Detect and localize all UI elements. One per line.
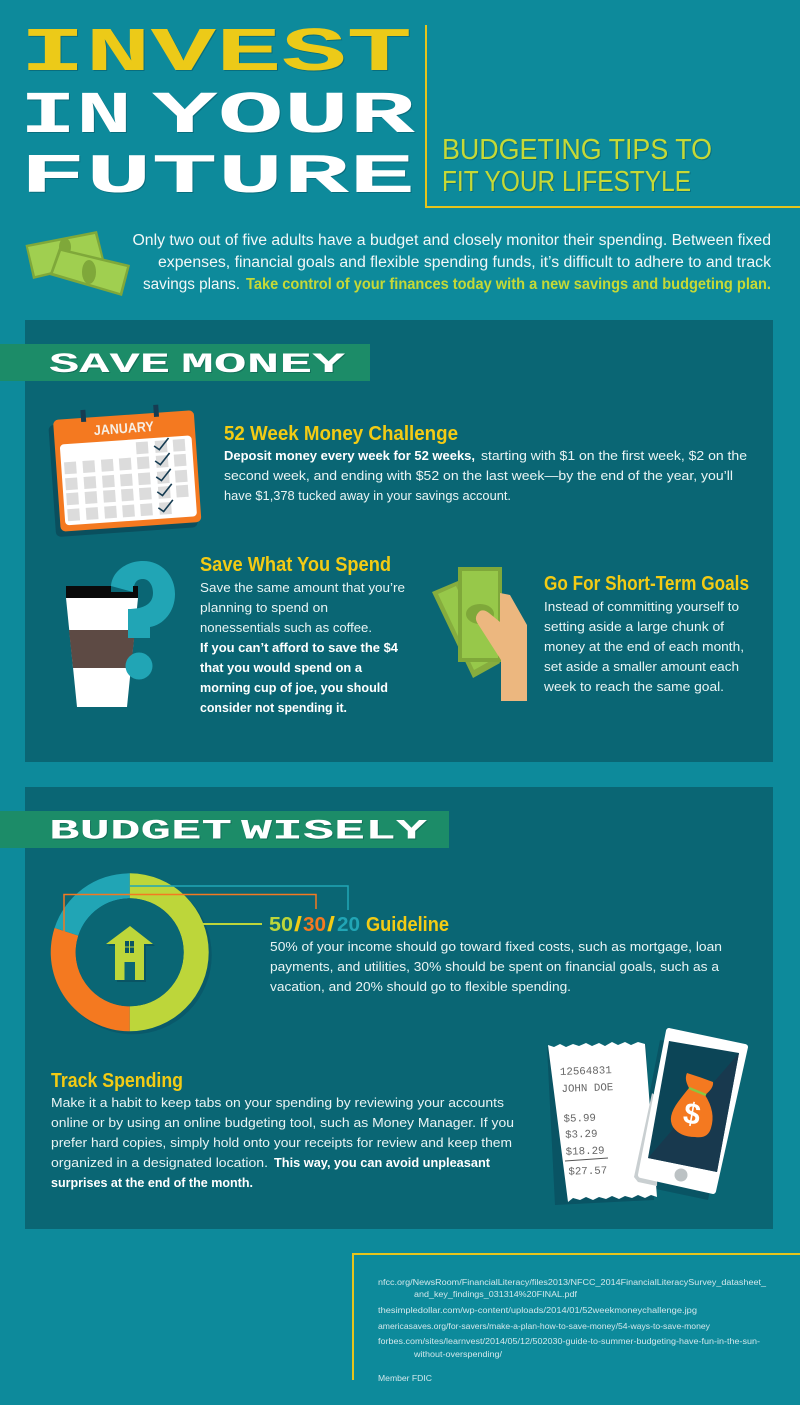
text: track spending: Make it a habit to keep tabs on your spending by reviewing your accounts: [51, 1095, 505, 1110]
sources text: forbes.com/sites/learnvest/2014/05/12/502030-guide-to-summer-budgeting-have-fun-in-the-sun-: [378, 1336, 760, 1346]
icon: receipt: JOHN DOE: [561, 1082, 614, 1096]
text: 50/30/20 guideline: 20: [337, 913, 360, 936]
section ribbon: save money: [0, 344, 370, 381]
intro text: Take control of your finances today with a new savings and budgeting plan.: [246, 276, 771, 293]
icon: receipt: $5.99: [563, 1113, 596, 1126]
text: 50/30/20 guideline: /: [294, 913, 302, 936]
text: save what you spend: If you can’t afford to save the $4: [200, 640, 399, 655]
text: 50/30/20 guideline: 30: [303, 913, 326, 936]
text: 52 week money challenge: 52 Week Money Challenge: [224, 422, 458, 445]
connector lines: [64, 886, 348, 933]
text: go for short-term goals: money at the end of each month,: [544, 639, 744, 654]
section ribbon: save money: SAVE: [49, 350, 170, 381]
icon: receipt: 12564831: [560, 1065, 612, 1079]
section ribbon: save money: MONEY: [181, 350, 345, 381]
title line: in: IN: [20, 83, 132, 150]
section ribbon: budget wisely: [0, 811, 449, 848]
intro text: expenses, financial goals and flexible spending funds, it’s difficult to adhere to and track: [158, 254, 771, 271]
sources text: americasaves.org/for-savers/make-a-plan-how-to-save-money/54-ways-to-save-money: [378, 1321, 711, 1331]
icon: phone with money bag: $: [681, 1097, 703, 1132]
icon: house: [106, 926, 155, 982]
section ribbon: budget wisely: WISELY: [241, 816, 427, 848]
sources frame: [353, 1254, 800, 1380]
text: save what you spend: morning cup of joe, you should: [200, 680, 388, 695]
icon: receipt: $3.29: [565, 1129, 598, 1142]
text: 50/30/20 guideline: [269, 913, 722, 994]
text: save what you spend: nonessentials such as coffee.: [200, 620, 372, 635]
text: go for short-term goals: Instead of committing yourself to: [544, 599, 739, 614]
text: go for short-term goals: week to reach the same goal.: [543, 679, 724, 694]
sources text: without-overspending/: [413, 1349, 503, 1359]
sources text: [378, 1277, 766, 1383]
text: 50/30/20 guideline: vacation, and 20% should go to flexible spending.: [270, 979, 571, 994]
text: 52 week money challenge: second week, and ending with $52 on the last week—by the end of the year, you’ll: [224, 468, 733, 483]
icon: dollar bills: [26, 231, 130, 296]
icon: calendar: [47, 402, 202, 537]
icon: receipt: $27.57: [568, 1165, 607, 1179]
title line: invest: INVEST: [20, 18, 412, 89]
intro text: Only two out of five adults have a budget and closely monitor their spending. Between fixed: [132, 232, 771, 249]
icon: phone with money bag: [634, 1031, 745, 1191]
text: go for short-term goals: [543, 572, 749, 694]
icon: receipt: [547, 1042, 657, 1205]
intro text: savings plans.: [143, 276, 240, 293]
subtitle frame: [426, 25, 800, 207]
intro text: [132, 232, 771, 293]
sources text: nfcc.org/NewsRoom/FinancialLiteracy/files2013/NFCC_2014FinancialLiteracySurvey_datasheet_: [378, 1277, 766, 1287]
icon: phone shadow on panel: [632, 1040, 738, 1200]
subtitle: BUDGETING TIPS TO: [442, 134, 712, 166]
text: 52 week money challenge: have $1,378 tucked away in your savings account.: [224, 488, 511, 503]
text: 50/30/20 guideline: Guideline: [366, 913, 449, 936]
text: track spending: [51, 1069, 514, 1190]
title line: future: FUTURE: [20, 145, 415, 209]
text: save what you spend: that you would spend on a: [200, 660, 363, 675]
text: track spending: This way, you can avoid unpleasant: [274, 1155, 491, 1170]
title line: your: YOUR: [152, 83, 416, 150]
icon: hand holding money: [432, 567, 527, 701]
text: go for short-term goals: Go For Short-Term Goals: [544, 572, 749, 595]
text: 52 week money challenge: Deposit money every week for 52 weeks,: [224, 448, 475, 463]
text: track spending: online or by using an online budgeting tool, such as Money Manager. If you: [51, 1115, 514, 1130]
icon: coffee cup with question mark: [66, 561, 175, 707]
text: save what you spend: [200, 553, 405, 715]
text: 50/30/20 guideline: /: [327, 913, 335, 936]
text: save what you spend: consider not spending it.: [200, 700, 347, 715]
text: save what you spend: Save What You Spend: [200, 553, 391, 576]
subtitle: FIT YOUR LIFESTYLE: [442, 166, 691, 198]
text: track spending: prefer hard copies, simply hold onto your receipts for review and keep them: [51, 1135, 512, 1150]
text: 52 week money challenge: starting with $1 on the first week, $2 on the: [481, 448, 747, 463]
text: 50/30/20 guideline: payments, and utilities, 30% should be spent on financial goals, such as a: [270, 959, 720, 974]
sources text: and_key_findings_031314%20FINAL.pdf: [414, 1289, 578, 1299]
text: track spending: surprises at the end of the month.: [51, 1175, 253, 1190]
sources text: Member FDIC: [378, 1373, 432, 1383]
sources text: thesimpledollar.com/wp-content/uploads/2014/01/52weekmoneychallenge.jpg: [378, 1305, 697, 1315]
panel: save money: [0, 320, 773, 762]
section ribbon: budget wisely: BUDGET: [49, 816, 232, 848]
title: [20, 18, 416, 209]
text: 50/30/20 guideline: 50: [269, 913, 293, 936]
text: save what you spend: planning to spend on: [200, 600, 328, 615]
donut chart: [51, 873, 212, 1034]
text: 50/30/20 guideline: 50% of your income should go toward fixed costs, such as mortgage, loan: [270, 939, 722, 954]
text: save what you spend: Save the same amount that you’re: [200, 580, 405, 595]
text: track spending: organized in a designated location.: [51, 1155, 268, 1170]
icon: calendar: JANUARY: [93, 418, 155, 438]
subtitle: [442, 134, 712, 198]
text: go for short-term goals: set aside a smaller amount each: [544, 659, 739, 674]
panel: budget wisely: [0, 787, 773, 1229]
icon: receipt: $18.29: [566, 1145, 605, 1159]
text: track spending: Track Spending: [51, 1069, 183, 1092]
text: go for short-term goals: setting aside a large chunk of: [544, 619, 724, 634]
text: 52 week money challenge: [224, 422, 747, 503]
